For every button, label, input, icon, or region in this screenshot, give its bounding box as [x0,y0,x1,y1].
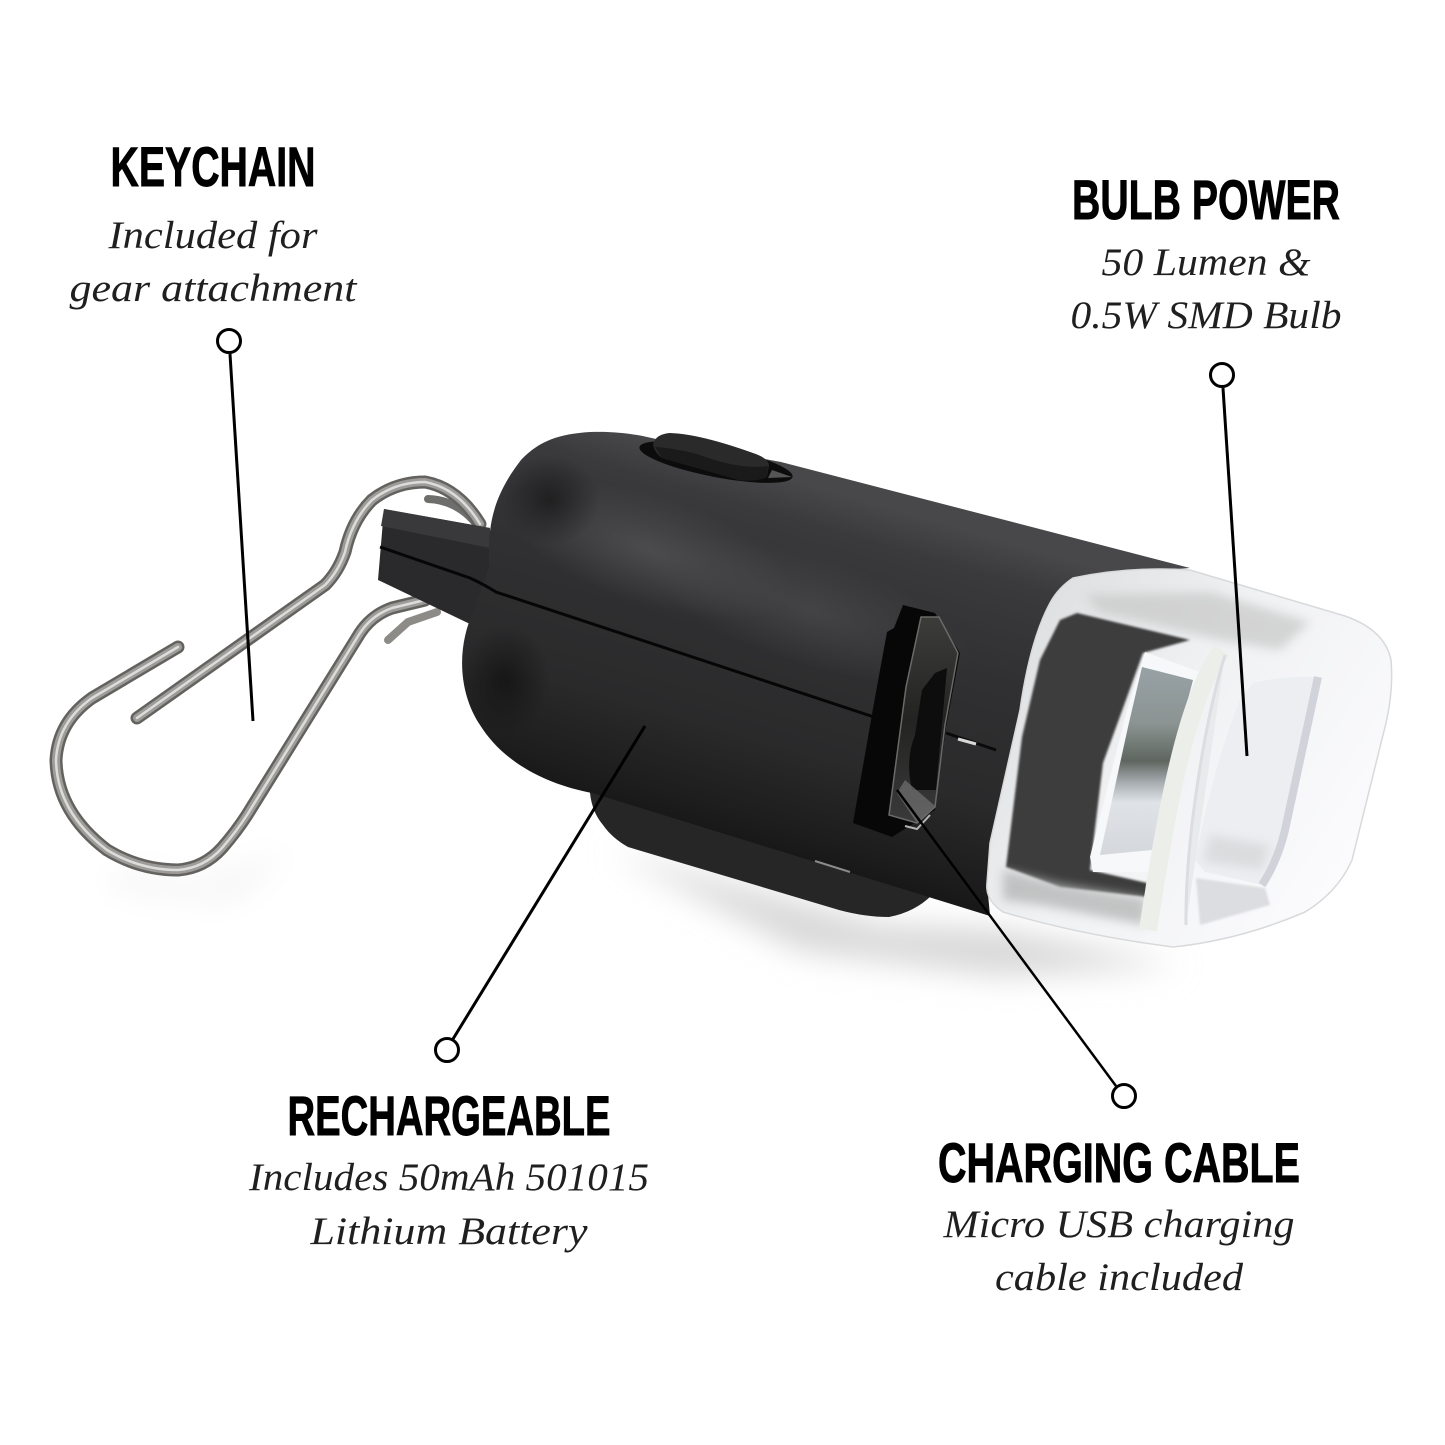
text block: Included for [107,214,318,257]
icon: keyring tab [378,509,490,640]
white frame [1090,652,1186,872]
ground shadow [110,850,1180,975]
text block [1070,241,1342,337]
top ghosting [1085,592,1310,650]
pointer line [218,330,253,721]
dark interior [1006,613,1190,897]
heading: RECHARGEABLE [288,1084,610,1147]
text block: 50 Lumen & [1102,241,1311,284]
flashlight body [380,432,1190,916]
switch [637,432,795,492]
pointer line [897,790,1136,1108]
window [1100,667,1193,855]
bright ring [1148,650,1222,930]
text block: gear attachment [70,267,358,310]
text block: 0.5W SMD Bulb [1070,294,1342,337]
heading: CHARGING CABLE [938,1131,1300,1194]
front panel [1195,677,1320,885]
callout: bulb power [1070,168,1342,756]
callout: charging cable [897,790,1300,1299]
body seam [380,547,874,717]
callout: rechargeable [248,726,649,1253]
pointer line [436,726,645,1062]
icon: clip under body [588,770,932,917]
heading: KEYCHAIN [110,135,316,198]
text block: Lithium Battery [309,1210,588,1253]
text block [942,1203,1294,1299]
icon: keychain hook [56,482,480,870]
callout: keychain [70,135,358,721]
pointer line [1210,364,1247,756]
text block [70,214,358,310]
text block: Micro USB charging [942,1203,1294,1246]
text block: Includes 50mAh 501015 [248,1156,649,1199]
text block [248,1156,649,1253]
product illustration: flashlight [56,432,1392,975]
usb port [853,605,960,837]
heading: BULB POWER [1072,168,1340,231]
lens [987,569,1392,947]
text block: cable included [995,1256,1244,1299]
